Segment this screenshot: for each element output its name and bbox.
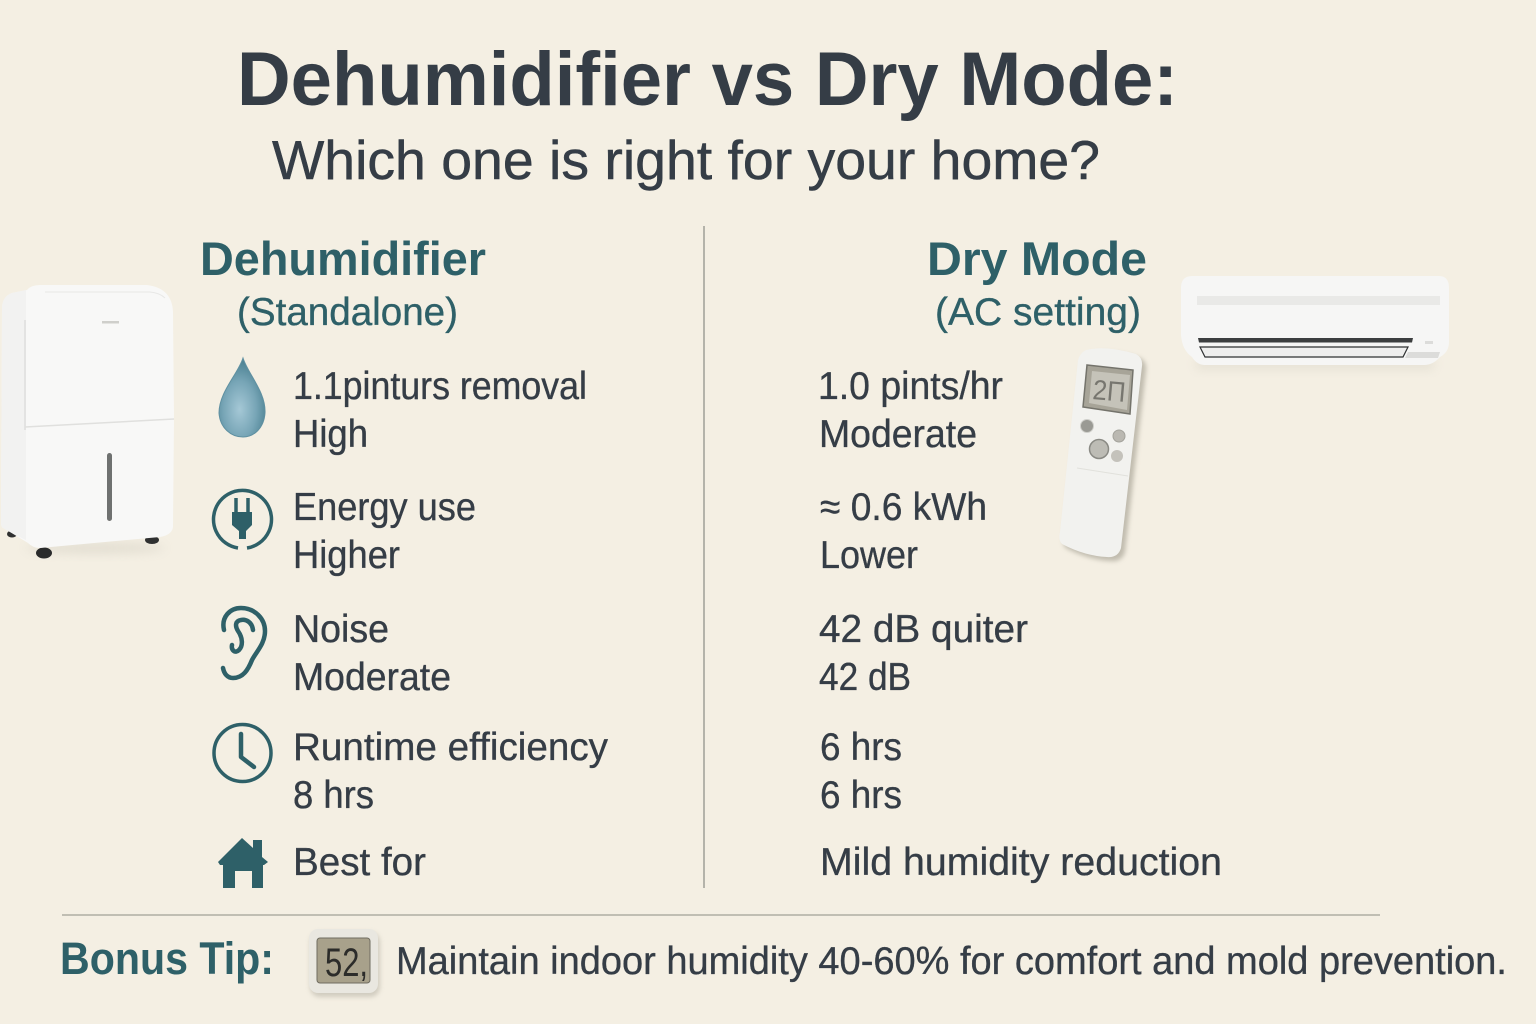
row: runtime efficiency: 8 hrs — [293, 774, 374, 817]
row: runtime value: 6 hrs — [820, 726, 902, 769]
heading: dry mode: Dry Mode — [927, 232, 1147, 285]
row: best for value: Mild humidity reduction — [820, 841, 1222, 884]
row: water removal value — [818, 365, 1003, 456]
icon: clock — [214, 724, 271, 782]
row: best for: Best for — [293, 841, 426, 884]
panel: dehumidifier column — [1, 232, 608, 888]
subheading: ac setting: (AC setting) — [935, 291, 1141, 334]
row: energy use — [213, 486, 476, 577]
image: remote control — [1059, 348, 1146, 561]
row: best for — [218, 838, 426, 888]
panel: dry mode column — [818, 232, 1449, 884]
icon: water drop — [219, 358, 265, 437]
row: noise value: 42 dB quiter — [819, 608, 1028, 651]
heading: dehumidifier: Dehumidifier — [200, 232, 486, 285]
icon: ear — [223, 608, 265, 678]
image: wall air conditioner — [1181, 276, 1449, 370]
row: water removal: 1.1pinturs removal — [293, 365, 587, 408]
row: runtime efficiency: Runtime efficiency — [293, 726, 608, 769]
row: energy use value — [820, 486, 987, 577]
row: water removal: High — [293, 413, 368, 456]
icon: hygrometer — [309, 929, 380, 997]
row: energy use: Energy use — [293, 486, 476, 529]
row: water removal value: Moderate — [819, 413, 977, 456]
icon: plug — [213, 490, 272, 548]
remote display reading: 2Π — [1091, 374, 1127, 408]
row: energy use value: Lower — [820, 534, 918, 577]
icon: hygrometer: 52, — [325, 941, 368, 985]
title: Dehumidifier vs Dry Mode: — [237, 37, 1178, 122]
bonus tip text: Maintain indoor humidity 40-60% for comfort and mold prevention. — [396, 940, 1507, 983]
icon: house — [218, 838, 268, 888]
row: runtime value — [820, 726, 902, 817]
bonus tip label: Bonus Tip: — [60, 933, 274, 984]
row: noise — [223, 608, 451, 699]
row: energy use value: ≈ 0.6 kWh — [820, 486, 987, 529]
row: energy use: Higher — [293, 534, 400, 577]
row: noise value — [819, 608, 1028, 699]
row: noise value: 42 dB — [819, 656, 911, 699]
row: water removal value: 1.0 pints/hr — [818, 365, 1003, 408]
row: water removal — [219, 358, 587, 456]
row: runtime efficiency — [214, 724, 608, 817]
row: runtime value: 6 hrs — [820, 774, 902, 817]
panel: bonus tip — [60, 929, 1507, 997]
subtitle: Which one is right for your home? — [272, 129, 1100, 191]
image: dehumidifier appliance — [1, 285, 174, 558]
subheading: standalone: (Standalone) — [237, 291, 458, 334]
row: noise: Noise — [293, 608, 389, 651]
row: noise: Moderate — [293, 656, 451, 699]
